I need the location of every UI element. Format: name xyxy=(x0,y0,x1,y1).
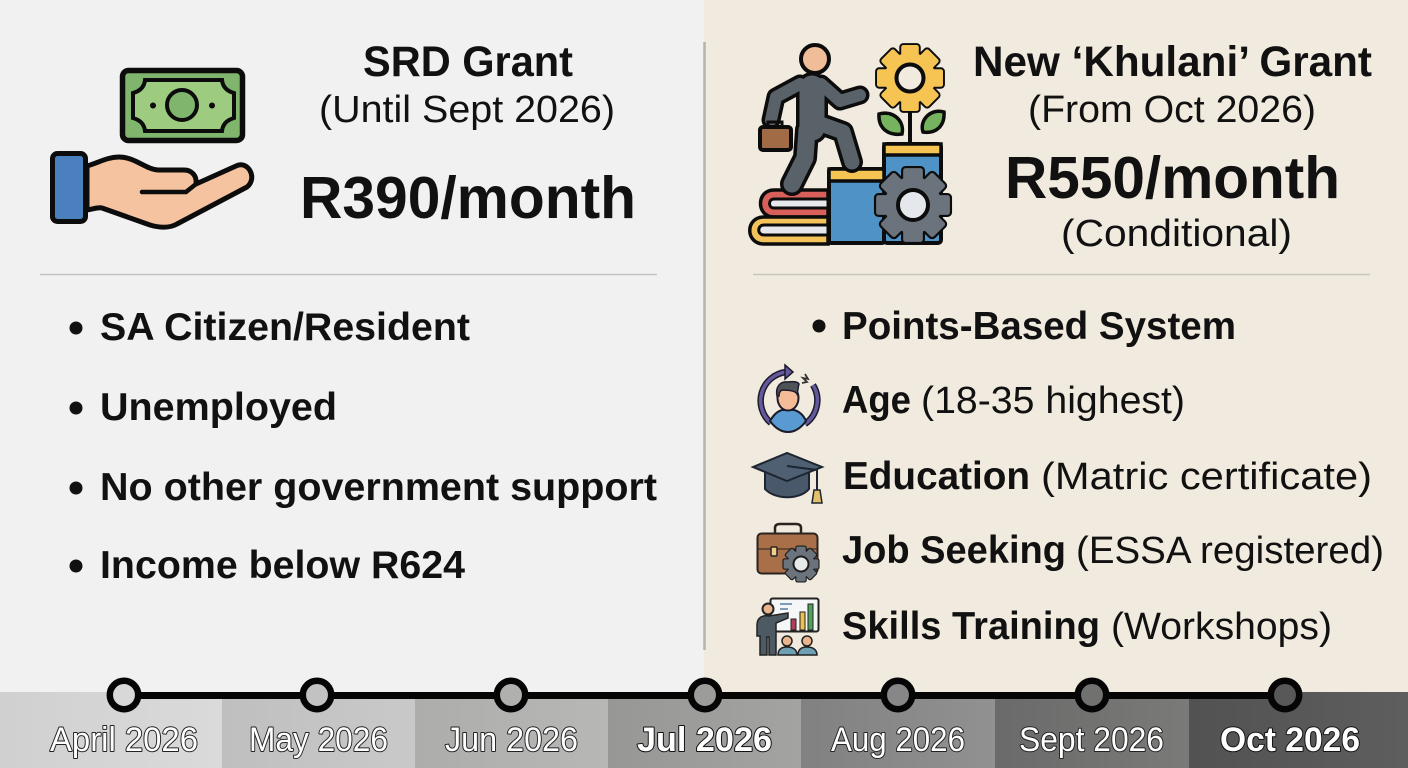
list: SRD eligibility criteria xyxy=(70,306,657,587)
text: job seeking criterion: Job Seeking xyxy=(842,529,1066,572)
text: from Oct 2026: (From Oct 2026) xyxy=(1028,89,1316,131)
timeline band xyxy=(0,692,1408,768)
icon: age cycle with person xyxy=(761,365,817,432)
text: R550 per month: R550/month xyxy=(1005,145,1340,211)
timeline labels: May 2026 xyxy=(249,721,388,759)
timeline labels: Sept 2026 xyxy=(1019,721,1164,759)
timeline labels: April 2026 xyxy=(50,721,198,759)
list: SRD eligibility criteria: No other government support xyxy=(100,466,657,509)
icon: briefcase with gear xyxy=(758,524,818,581)
text: job seeking criterion xyxy=(842,529,1384,572)
text: education criterion: (Matric certificate) xyxy=(1041,456,1372,498)
icon: presenter with chart and audience xyxy=(757,598,818,655)
text: job seeking criterion: (ESSA registered) xyxy=(1076,530,1384,572)
timeline labels: Oct 2026 xyxy=(1220,721,1360,759)
text: age criterion: (18-35 highest) xyxy=(921,380,1185,422)
timeline line with month markers xyxy=(110,681,1299,709)
text: until Sept 2026: (Until Sept 2026) xyxy=(319,89,615,131)
panel: SRD grant background xyxy=(0,0,704,692)
list: SRD eligibility criteria: Income below R624 xyxy=(100,544,465,587)
list: SRD eligibility criteria: SA Citizen/Resident xyxy=(100,306,470,349)
list: SRD eligibility criteria: Unemployed xyxy=(100,386,337,429)
timeline labels: Aug 2026 xyxy=(831,721,965,759)
list item: points-based system: Points-Based System xyxy=(842,305,1236,348)
panel: Khulani grant background xyxy=(704,0,1408,692)
text: conditional: (Conditional) xyxy=(1061,213,1292,255)
timeline labels: Jun 2026 xyxy=(445,721,578,759)
text: age criterion: Age xyxy=(842,379,911,422)
text: education criterion xyxy=(843,455,1372,498)
text: skills training criterion xyxy=(842,605,1332,648)
heading: SRD Grant: SRD Grant xyxy=(363,38,573,86)
text: R390 per month: R390/month xyxy=(300,165,636,231)
text: skills training criterion: (Workshops) xyxy=(1111,606,1332,648)
timeline labels xyxy=(50,721,1360,759)
icon: graduation cap xyxy=(753,453,822,503)
icon: person climbing books and gears xyxy=(750,45,950,244)
text: education criterion: Education xyxy=(843,455,1030,498)
text: skills training criterion: Skills Training xyxy=(842,605,1100,648)
heading: New Khulani Grant: New ‘Khulani’ Grant xyxy=(973,38,1372,86)
timeline labels: Jul 2026 xyxy=(637,721,772,759)
icon: banknote over open hand xyxy=(52,70,252,227)
